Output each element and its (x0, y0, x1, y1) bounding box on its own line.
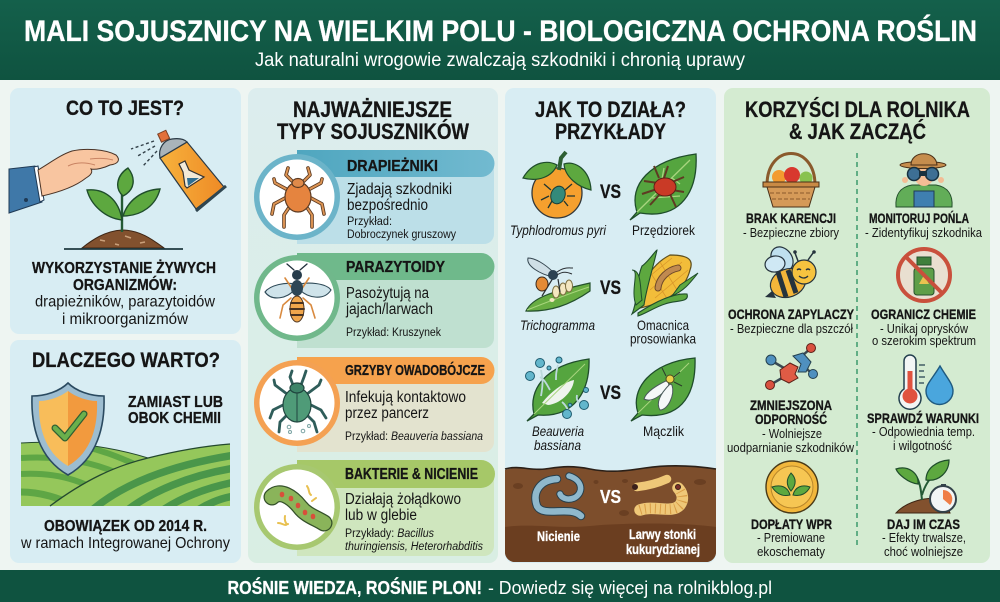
text: definition (32, 259, 216, 328)
labels: row 3: bassiana (534, 437, 581, 453)
text: - Premiowane (757, 530, 825, 545)
card description: Przykład: Beauveria bassiana (345, 431, 483, 443)
heading: typy sojusznikow (277, 97, 469, 144)
labels: row 2: Omacnica (637, 317, 689, 333)
icon: trichogramma on eggs (526, 258, 590, 311)
text: definition: WYKORZYSTANIE ŻYWYCH (32, 259, 216, 277)
card description: Działają żołądkowo (345, 491, 461, 508)
card description (347, 181, 456, 241)
icon: coin with sprout (766, 461, 818, 513)
labels: row 1: Przędziorek (632, 222, 696, 238)
text: o szerokim spektrum (872, 333, 976, 348)
card title: PARAZYTOIDY (346, 259, 445, 276)
card description: Przykład: (347, 216, 392, 228)
text: definition: ORGANIZMÓW: (73, 275, 177, 294)
card description: przez pancerz (345, 405, 429, 422)
icon: leaf with spider mite (630, 154, 696, 220)
header banner (0, 0, 1000, 80)
panel: korzysci (724, 88, 990, 563)
footer banner (0, 570, 1000, 602)
text: zamiast lub obok chemii: OBOK CHEMII (128, 410, 221, 427)
card title: BAKTERIE & NICIENIE (345, 466, 478, 483)
icon: hand over plant (9, 149, 118, 213)
card description (345, 285, 441, 339)
item: brak karencji (743, 154, 839, 240)
labels: row 2: prosowianka (630, 330, 696, 346)
text (743, 211, 839, 240)
text: ekoschematy (757, 544, 825, 559)
icon: orange with predatory mite (523, 152, 591, 218)
card title: DRAPIEŻNIKI (347, 157, 438, 175)
text (727, 398, 855, 455)
label: larwy stonki (626, 526, 700, 557)
item: ogranicz chemie (871, 249, 976, 348)
card description (345, 389, 483, 443)
card description: Przykład: Kruszynek (346, 327, 441, 339)
subtitle: Jak naturalni wrogowie zwalczają szkodniki i chronią uprawy (255, 50, 745, 71)
text (882, 517, 966, 559)
text: obowiazek (20, 518, 230, 552)
text: definition: i mikroorganizmów (62, 311, 188, 328)
panel: co to jest (9, 88, 241, 334)
text: SPRAWDŹ WARUNKI (867, 411, 979, 426)
icon: beauveria spores on leaf (526, 357, 589, 421)
icon: infected beetle (270, 371, 326, 434)
card description: Dobroczynek gruszowy (347, 229, 456, 241)
text: - Unikaj oprysków (880, 321, 969, 336)
heading: jak to dziala: PRZYKŁADY (555, 119, 666, 144)
icon: spray can (131, 130, 226, 211)
card description: bezpośrednio (347, 197, 428, 214)
icon: broken molecule (766, 344, 818, 390)
text: zamiast lub obok chemii: ZAMIAST LUB (128, 394, 223, 411)
card title: GRZYBY OWADOBÓJCZE (345, 361, 485, 379)
text (728, 307, 854, 336)
text: zamiast lub obok chemii (128, 394, 223, 427)
text: obowiazek: w ramach Integrowanej Ochrony (20, 535, 230, 552)
heading: typy sojusznikow: TYPY SOJUSZNIKÓW (277, 119, 469, 144)
text: - Bezpieczne zbiory (743, 225, 839, 240)
icon: shield with check (32, 383, 104, 475)
icon: infected caterpillar (272, 486, 324, 525)
card description: Pasożytują na (346, 285, 429, 302)
item: daj im czas (882, 460, 966, 559)
label: vs: VS (600, 182, 621, 203)
text: ODPORNOŚĆ (755, 412, 827, 427)
labels: row 3: Beauveria (532, 423, 584, 439)
text: OCHRONA ZAPYLACZY (728, 307, 854, 322)
labels: row 3: Mączlik (643, 423, 685, 439)
text: DAJ IM CZAS (887, 517, 960, 532)
card: bakterie i nicienie (254, 460, 495, 556)
item: zmniejszona odpornosc (727, 344, 855, 455)
label: vs: VS (600, 383, 621, 404)
icon: sprout with stopwatch (896, 460, 956, 513)
card description: jajach/larwach (345, 301, 433, 318)
text: MONITORUJ POŃLA (869, 211, 969, 226)
heading: co to jest: CO TO JEST? (66, 97, 184, 120)
card description: lub w glebie (345, 507, 417, 524)
text: i wilgotność (893, 438, 952, 453)
item: monitoruj pola (865, 154, 983, 240)
text: - Odpowiednia temp. (872, 424, 975, 439)
card: drapiezniki (254, 150, 495, 244)
card description: Przykłady: Bacillus (345, 528, 434, 540)
text (867, 411, 979, 453)
panel: typy sojusznikow (248, 88, 498, 563)
text: choć wolniejsze (884, 544, 963, 559)
card: grzyby owadobojcze (254, 357, 495, 452)
text: obowiazek: OBOWIĄZEK OD 2014 R. (44, 518, 207, 535)
icon: farmer with binoculars (896, 154, 952, 207)
panel: dlaczego warto (10, 340, 241, 563)
icon: predatory mite (272, 168, 324, 227)
icon: no chemicals (898, 249, 950, 301)
icon: nematodes (536, 476, 581, 516)
icon: basket (763, 154, 819, 207)
icon: parasitoid wasp (265, 264, 331, 322)
text: DOPŁATY WPR (751, 517, 832, 532)
label: larwy stonki: kukurydzianej (626, 541, 700, 557)
item: doplaty wpr (751, 461, 832, 559)
text (871, 307, 976, 348)
text: OGRANICZ CHEMIE (871, 307, 976, 322)
illustration: green fields (21, 442, 235, 512)
footer slogan: ROŚNIE WIEDZA, ROŚNIE PLON! (228, 577, 482, 598)
footer link: - Dowiedz się więcej na rolnikblog.pl (488, 578, 772, 598)
panel: jak to dziala (505, 88, 716, 565)
card: parazytoidy (254, 253, 495, 348)
labels: row 2: Trichogramma (520, 317, 595, 333)
card description (345, 491, 483, 553)
icon: thermometer and drop (899, 355, 953, 409)
icon: corn rootworm larvae (632, 479, 682, 510)
heading: dlaczego warto: DLACZEGO WARTO? (32, 348, 220, 372)
label: vs: VS (600, 487, 621, 507)
icon: whitefly on leaf (631, 358, 695, 421)
text: definition: drapieżników, parazytoidów (35, 294, 215, 310)
soil section (505, 465, 716, 565)
heading: jak to dziala (535, 97, 686, 144)
text (751, 517, 832, 559)
text (865, 211, 983, 240)
heading: jak to dziala: JAK TO DZIAŁA? (535, 97, 686, 122)
heading: typy sojusznikow: NAJWAŻNIEJSZE (293, 97, 452, 122)
label: vs: VS (600, 278, 621, 299)
heading: korzysci: & JAK ZACZĄĆ (789, 119, 926, 144)
labels: row 1: Typhlodromus pyri (510, 222, 607, 238)
text: ZMNIEJSZONA (750, 398, 832, 413)
icon: bee (764, 243, 816, 302)
text: - Zidentyfikuj szkodnika (865, 225, 983, 240)
item: ochrona zapylaczy (728, 243, 854, 336)
labels: row 1 (510, 222, 696, 238)
card description: Infekują kontaktowo (345, 389, 466, 406)
item: sprawdz warunki (867, 355, 979, 453)
label: larwy stonki: Larwy stonki (629, 526, 696, 542)
labels: row 3 (532, 423, 685, 453)
icon: seedling (64, 168, 183, 249)
icon: corn with borer (632, 250, 698, 316)
text: - Wolniejsze (762, 426, 822, 441)
card description: thuringiensis, Heterorhabditis (345, 541, 483, 553)
text: - Bezpieczne dla pszczół (730, 321, 853, 336)
text: - Efekty trwalsze, (882, 530, 966, 545)
label: nicienie: Nicienie (537, 528, 580, 544)
card description: Zjadają szkodniki (347, 181, 452, 198)
text: BRAK KARENCJI (746, 211, 836, 226)
labels: row 2 (520, 317, 696, 346)
heading: korzysci (745, 97, 970, 144)
text: uodparnianie szkodników (727, 440, 855, 455)
